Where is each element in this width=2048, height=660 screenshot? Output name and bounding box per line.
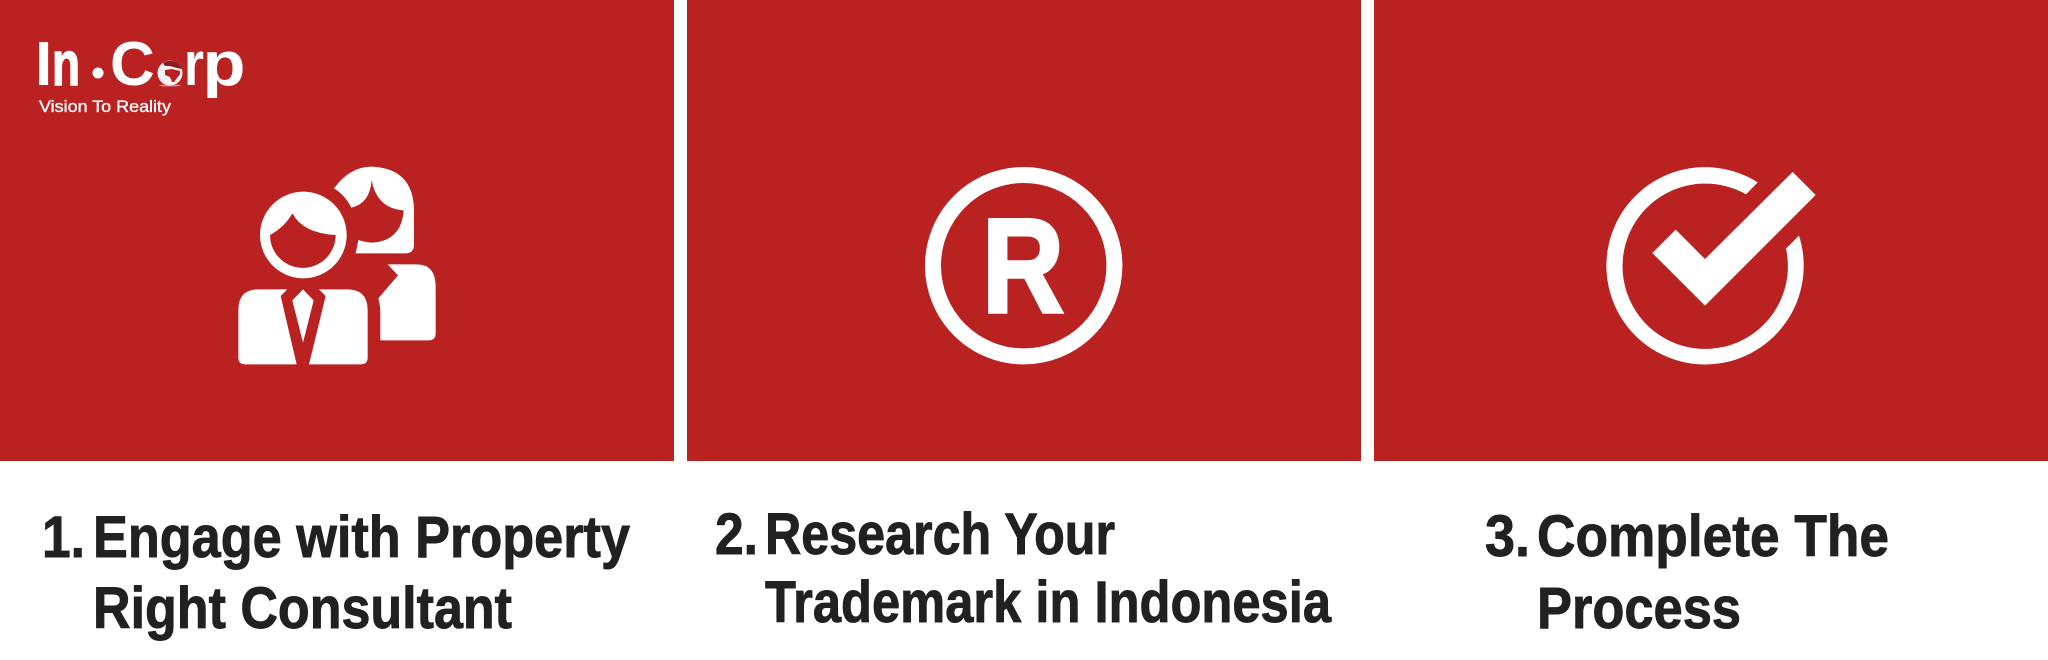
panel: step 1 <box>0 0 674 461</box>
heading: step 2: Research Your <box>765 502 1115 567</box>
heading: step 2 <box>715 502 1332 635</box>
heading: step 3: Process <box>1537 576 1741 641</box>
heading: step 1 <box>42 505 630 641</box>
icon: consultant people <box>238 167 436 364</box>
heading: step 3 <box>1485 504 1889 641</box>
icon: registered trademark <box>933 175 1114 356</box>
heading: step 2: Trademark in Indonesia <box>765 570 1332 635</box>
panel: step 3 <box>1374 0 2048 461</box>
logo wordmark: p <box>202 30 246 99</box>
icon: globe <box>158 60 182 86</box>
woman body <box>378 264 436 340</box>
logo wordmark: I <box>35 30 52 99</box>
logo tagline: Vision To Reality <box>39 97 172 116</box>
logo wordmark: n <box>52 30 80 99</box>
man jacket right <box>309 289 368 364</box>
man head <box>260 192 347 278</box>
check tick <box>1652 172 1816 306</box>
registered ring <box>933 175 1114 356</box>
heading: step 1: 1. <box>42 505 85 570</box>
heading: step 1: Engage with Property <box>93 505 630 570</box>
man jacket left <box>238 289 297 364</box>
panel: step 2 <box>687 0 1361 461</box>
logo wordmark: r <box>184 30 204 99</box>
heading: step 3: 3. <box>1485 504 1530 569</box>
logo: InCorp <box>35 30 246 116</box>
woman hair <box>334 167 414 253</box>
man tie <box>292 289 314 343</box>
icon: check mark <box>1606 167 1816 364</box>
heading: step 1: Right Consultant <box>93 576 512 641</box>
heading: step 2: 2. <box>715 502 758 567</box>
logo wordmark <box>35 30 246 99</box>
logo wordmark: C <box>110 30 155 99</box>
heading: step 3: Complete The <box>1537 504 1889 569</box>
check ring <box>1606 167 1804 364</box>
registered letter: R <box>982 192 1064 341</box>
